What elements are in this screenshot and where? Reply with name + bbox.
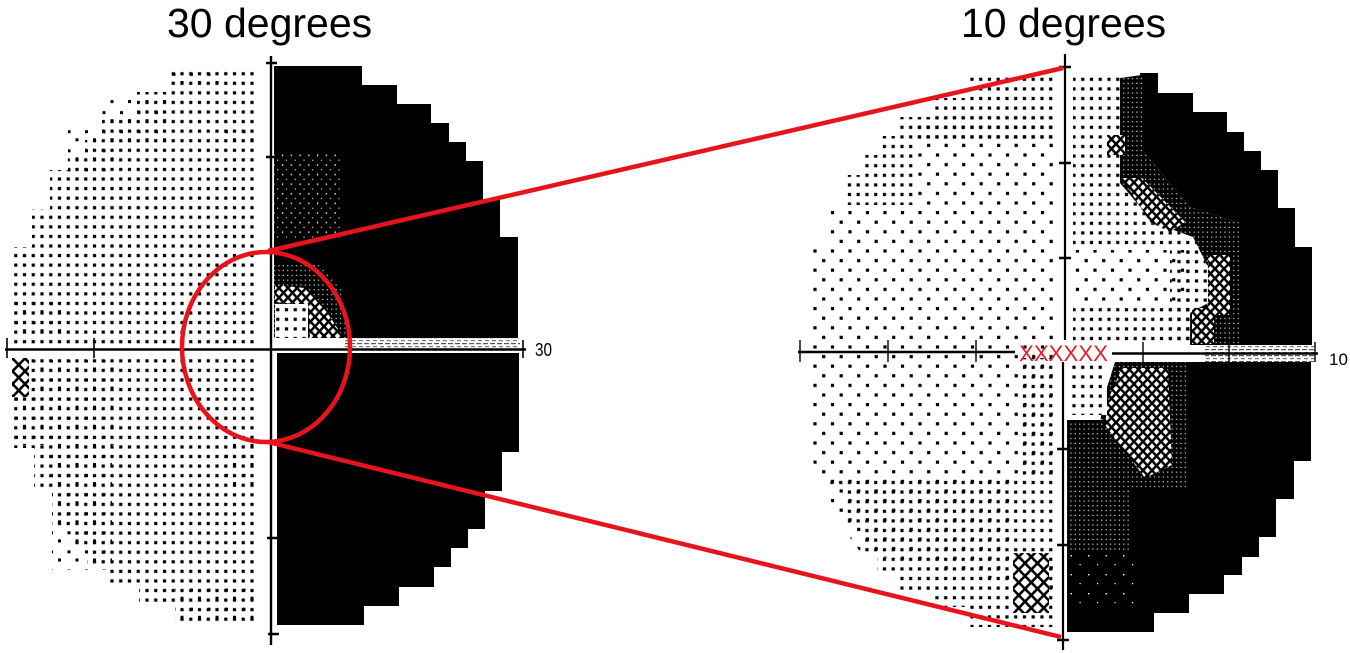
panel: 30 degree visual field: [5, 56, 552, 645]
title: 10 degrees: 10 degrees: [961, 0, 1166, 46]
black defect: lower right quadrant: [277, 353, 519, 625]
dots: dense strip upper left: [915, 117, 1054, 140]
icon: cross marks at left edge: [12, 358, 29, 397]
black defect: upper right quadrant: [1140, 73, 1312, 345]
dots: upper left quadrant: [14, 68, 258, 345]
sparse patch in right field: [1072, 250, 1190, 345]
speckled region in upper defect: [274, 152, 342, 240]
title: 30 degrees: 30 degrees: [167, 0, 372, 46]
axes: 10 degree plot: [798, 54, 1318, 650]
speckled strip along horizontal meridian: [345, 338, 520, 352]
red blind-spot marks: XXXXXX: [1019, 341, 1108, 366]
axis label: 10: 10: [1329, 350, 1348, 369]
red magnifier line: lower: [268, 442, 1061, 637]
icon: hatched patch lower left: [1013, 553, 1049, 613]
dots: sparse lower cluster columns: [1020, 358, 1054, 478]
dots: lower left quadrant: [14, 356, 258, 626]
central partial defect: [1067, 362, 1186, 612]
black defect: upper right quadrant: [274, 66, 518, 338]
dots: dense lower left: [826, 478, 1054, 627]
hatched crosses: [1107, 135, 1230, 344]
red magnifier outline: circle: [182, 252, 350, 442]
speckled strip along horizontal meridian: [1205, 346, 1315, 362]
central partial defect with hatching: [274, 262, 346, 338]
axis label: 30: 30: [535, 340, 552, 360]
panel: 10 degree visual field: [798, 54, 1348, 650]
hatching band along defect edge: [1120, 75, 1240, 345]
dots: dense upper left: [844, 76, 1054, 205]
red magnifier line: upper: [268, 68, 1063, 251]
dots: sparse left field: [809, 140, 1054, 590]
dots: extra cluster marks: [15, 68, 260, 625]
black defect: lower right quadrant: [1067, 362, 1311, 632]
dots: near-axis right field: [1073, 76, 1208, 345]
axes: 30 degree plot: [5, 56, 526, 645]
